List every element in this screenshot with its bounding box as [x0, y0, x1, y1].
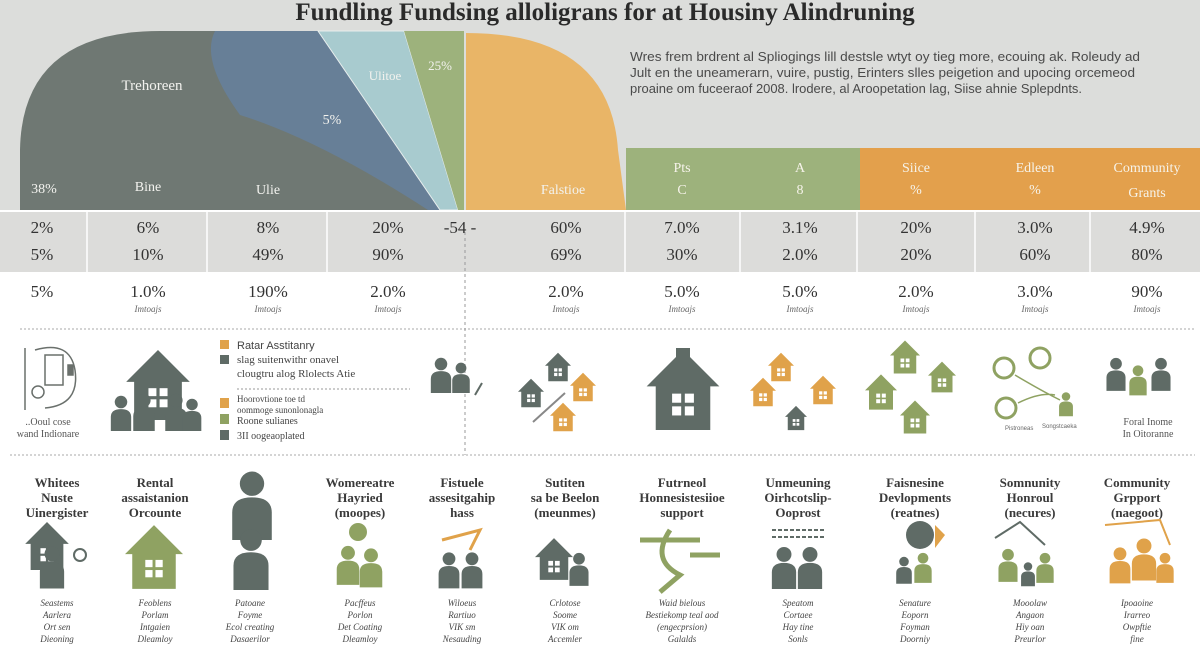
bottom columns: captions: Soome — [553, 610, 577, 620]
bottom columns: program headings: Orcounte — [129, 505, 181, 520]
chart: funding half-pie: 5% — [323, 113, 342, 128]
bottom columns: captions: Angaon — [1015, 610, 1044, 620]
bottom columns: captions: Hay tine — [782, 622, 813, 632]
data table: 3.0% — [1017, 218, 1053, 237]
category bands: % — [1029, 183, 1041, 198]
data table: 30% — [666, 245, 698, 264]
data table: 2.0% — [370, 282, 406, 301]
legend — [220, 340, 410, 442]
bottom columns: program headings: Nuste — [41, 490, 73, 505]
icon: large house — [647, 348, 719, 430]
data table: 90% — [372, 245, 404, 264]
bottom columns: captions: Intgaien — [139, 622, 170, 632]
bottom columns: captions: Feoblens — [138, 598, 172, 608]
data table: 5.0% — [782, 282, 818, 301]
legend: 3II oogeaoplated — [237, 431, 304, 442]
data table: 7.0% — [664, 218, 700, 237]
bottom columns: captions: Patoane — [234, 598, 265, 608]
bottom columns: captions: Det Coating — [337, 622, 383, 632]
data table: Imtoajs — [1020, 304, 1049, 314]
bottom columns: captions: Mooolaw — [1012, 598, 1047, 608]
bottom columns: captions: Ipoaoine — [1120, 598, 1153, 608]
chart: funding half-pie: 25% — [428, 58, 452, 73]
bottom columns: program headings: sa be Beelon — [531, 490, 600, 505]
legend: Ratar Asstitanry — [237, 340, 315, 352]
icon: people group — [1106, 358, 1174, 440]
bottom columns: captions: Rartiuo — [447, 610, 476, 620]
data table: 2.0% — [782, 245, 818, 264]
bottom columns: captions: VIK sm — [449, 622, 476, 632]
bottom columns: captions: Eoporn — [900, 610, 929, 620]
bottom columns: program headings: Honnesistesiioe — [639, 490, 725, 505]
bottom columns: program headings: Sutiten — [545, 475, 586, 490]
chart: funding half-pie: Ulie — [256, 183, 280, 198]
bottom columns: captions: Accemler — [547, 634, 582, 644]
bottom columns: captions: Pacffeus — [344, 598, 376, 608]
data table: 10% — [132, 245, 164, 264]
bottom columns: program headings: Unmeuning — [765, 475, 831, 490]
data table: 1.0% — [130, 282, 166, 301]
bottom columns: program headings: Ooprost — [775, 505, 821, 520]
bottom columns: program headings: Faisnesine — [886, 475, 944, 490]
bottom columns: program headings: Rental — [137, 475, 174, 490]
chart: funding half-pie — [20, 31, 626, 210]
bottom columns: captions: Nesauding — [442, 634, 482, 644]
bottom columns: captions: Bestiekomp teal aod — [646, 610, 719, 620]
bottom columns: program headings: Hayried — [337, 490, 384, 505]
bottom columns: captions: VIK om — [551, 622, 579, 632]
icon: process diagram: ..Ooul cose — [25, 417, 71, 428]
category bands: C — [677, 183, 687, 198]
category bands — [626, 148, 1200, 210]
bottom columns: captions: Dleamloy — [342, 634, 378, 644]
bottom columns: program headings: assaistanion — [121, 490, 189, 505]
data table: 60% — [1019, 245, 1051, 264]
bottom columns: captions: Owpftie — [1123, 622, 1151, 632]
icon: process diagram: wand Indionare — [17, 429, 80, 440]
data table — [0, 210, 1200, 330]
category bands: Siice — [902, 161, 930, 176]
legend: oommoge sunonlonagla — [237, 405, 323, 415]
description paragraph: proaine om fuceeraof 2008. lrodere, al Aroopetation lag, Siise ahnie Splepdnts. — [630, 82, 1082, 96]
bottom columns: captions: Cortaee — [784, 610, 813, 620]
bottom columns: captions: Doorniy — [899, 634, 930, 644]
icon: process diagram — [17, 348, 80, 440]
bottom columns: program headings: Honroul — [1007, 490, 1054, 505]
bottom columns: program headings: assesitgahip — [429, 490, 495, 505]
bottom columns: captions: Ort sen — [44, 622, 71, 632]
bottom columns: program headings: Grpport — [1114, 490, 1161, 505]
chart: funding half-pie: 38% — [31, 182, 57, 197]
data table: -54 - — [444, 218, 477, 237]
bottom columns: program headings: (moopes) — [335, 505, 385, 520]
category bands: Grants — [1128, 186, 1166, 201]
icon: two people — [431, 358, 482, 395]
category bands: A — [795, 161, 806, 176]
data table: Imtoajs — [374, 304, 402, 314]
data table: 49% — [252, 245, 284, 264]
bottom columns: captions: Foyman — [899, 622, 930, 632]
bottom columns: captions: Ecol creating — [225, 622, 275, 632]
bottom columns: captions: Dasaerilor — [229, 634, 270, 644]
data table: 5% — [31, 282, 53, 301]
bottom columns: program headings: (reatnes) — [891, 505, 939, 520]
bottom columns: program headings: Devlopments — [879, 490, 951, 505]
bottom columns: captions: Crlotose — [549, 598, 581, 608]
data table: 2% — [31, 218, 53, 237]
bottom columns: captions: Preurlor — [1013, 634, 1046, 644]
legend: Hoorovtione toe td — [237, 394, 305, 404]
legend: slag suitenwithr onavel — [237, 354, 339, 366]
chart: funding half-pie: Bine — [135, 180, 161, 195]
category bands: % — [910, 183, 922, 198]
data table: 80% — [1131, 245, 1163, 264]
bottom columns: captions: Dieoning — [39, 634, 74, 644]
bottom columns: captions: Galalds — [668, 634, 697, 644]
bottom columns: program headings: hass — [450, 505, 474, 520]
category bands: Pts — [673, 161, 691, 176]
data table: 2.0% — [898, 282, 934, 301]
bottom columns: captions: Speatom — [782, 598, 814, 608]
bottom columns: captions: (engecprsion) — [657, 622, 707, 632]
legend: Roone sulianes — [237, 416, 298, 427]
bottom columns: program headings: Uinergister — [26, 505, 89, 520]
category bands: 8 — [796, 183, 804, 198]
data table: 3.0% — [1017, 282, 1053, 301]
icon: money flow: Pistroneas — [1005, 426, 1033, 432]
data table: 69% — [550, 245, 582, 264]
category bands: Community — [1114, 161, 1180, 176]
category bands: Edleen — [1016, 161, 1054, 176]
chart: funding half-pie: Trehoreen — [121, 78, 183, 94]
icon: people group: In Oitoranne — [1123, 429, 1174, 440]
data table: Imtoajs — [134, 304, 162, 314]
bottom columns: captions: Sonls — [788, 634, 808, 644]
data table: 90% — [1131, 282, 1163, 301]
bottom columns: program headings: support — [660, 505, 704, 520]
description paragraph: Jult en the uneamerarn, vuire, pustig, Erinters slles peigetion and upocing orcemeod — [630, 66, 1135, 80]
bottom columns: program headings: Oirhcotslip- — [764, 490, 832, 505]
bottom columns: program headings: Futrneol — [658, 475, 707, 490]
description paragraph: Wres frem brdrent al Spliogings lill destsle wtyt oy tieg more, ecouing ak. Roleudy ad — [630, 50, 1140, 64]
data table: Imtoajs — [552, 304, 580, 314]
bottom columns: program headings: Community — [1104, 475, 1171, 490]
bottom columns: program headings: Somnunity — [1000, 475, 1061, 490]
bottom columns: program headings: (necures) — [1004, 505, 1056, 520]
icon: house cluster — [518, 353, 596, 431]
bottom columns: captions: Hiy oan — [1015, 622, 1045, 632]
data table: 4.9% — [1129, 218, 1165, 237]
top background — [0, 0, 1200, 272]
bottom columns: captions: fine — [1130, 634, 1144, 644]
chart: funding half-pie: Falstioe — [541, 183, 585, 198]
bottom columns: captions: Irarreo — [1123, 610, 1151, 620]
bottom columns: captions — [39, 598, 1153, 644]
bottom columns: program headings: Womereatre — [326, 475, 395, 490]
icon: people group: Foral Inome — [1123, 417, 1173, 428]
icon: green houses — [865, 340, 956, 434]
data table: 20% — [900, 218, 932, 237]
bottom columns: captions: Seastems — [40, 598, 74, 608]
bottom columns: program headings: (naegoot) — [1111, 505, 1163, 520]
bottom columns: captions: Aarlera — [42, 610, 71, 620]
bottom columns: captions: Dleamloy — [136, 634, 172, 644]
data table: 3.1% — [782, 218, 818, 237]
data table: Imtoajs — [786, 304, 814, 314]
data table: 20% — [372, 218, 404, 237]
data table: 5.0% — [664, 282, 700, 301]
bottom columns: captions: Wiloeus — [448, 598, 477, 608]
data table: Imtoajs — [1132, 304, 1161, 314]
bottom columns: captions: Senature — [899, 598, 931, 608]
bottom columns: icons — [25, 472, 1174, 592]
bottom columns: captions: Porlon — [346, 610, 373, 620]
data table: Imtoajs — [902, 304, 930, 314]
data table: Imtoajs — [668, 304, 696, 314]
data table: Imtoajs — [254, 304, 282, 314]
bottom columns: program headings: Fistuele — [440, 475, 484, 490]
data table: 60% — [550, 218, 582, 237]
icon: orange houses — [750, 353, 836, 430]
data table: 190% — [248, 282, 288, 301]
data table: 20% — [900, 245, 932, 264]
icon: house with families — [111, 350, 201, 431]
data table: 5% — [31, 245, 53, 264]
icon: money flow — [994, 348, 1077, 432]
data table: 6% — [137, 218, 159, 237]
bottom columns: program headings — [26, 475, 1171, 520]
bottom columns: program headings: (meunmes) — [534, 505, 596, 520]
legend: clougtru alog Rlolects Atie — [237, 368, 355, 380]
icon: money flow: Songstcaeka — [1042, 424, 1077, 430]
bottom columns: captions: Waid bielous — [659, 598, 706, 608]
bottom columns: program headings: Whitees — [35, 475, 79, 490]
bottom columns: captions: Porlam — [140, 610, 169, 620]
data table: 2.0% — [548, 282, 584, 301]
description paragraph — [630, 50, 1140, 96]
bottom columns: captions: Foyme — [237, 610, 262, 620]
data table: 8% — [257, 218, 279, 237]
chart: funding half-pie: Ulitoe — [369, 68, 401, 83]
